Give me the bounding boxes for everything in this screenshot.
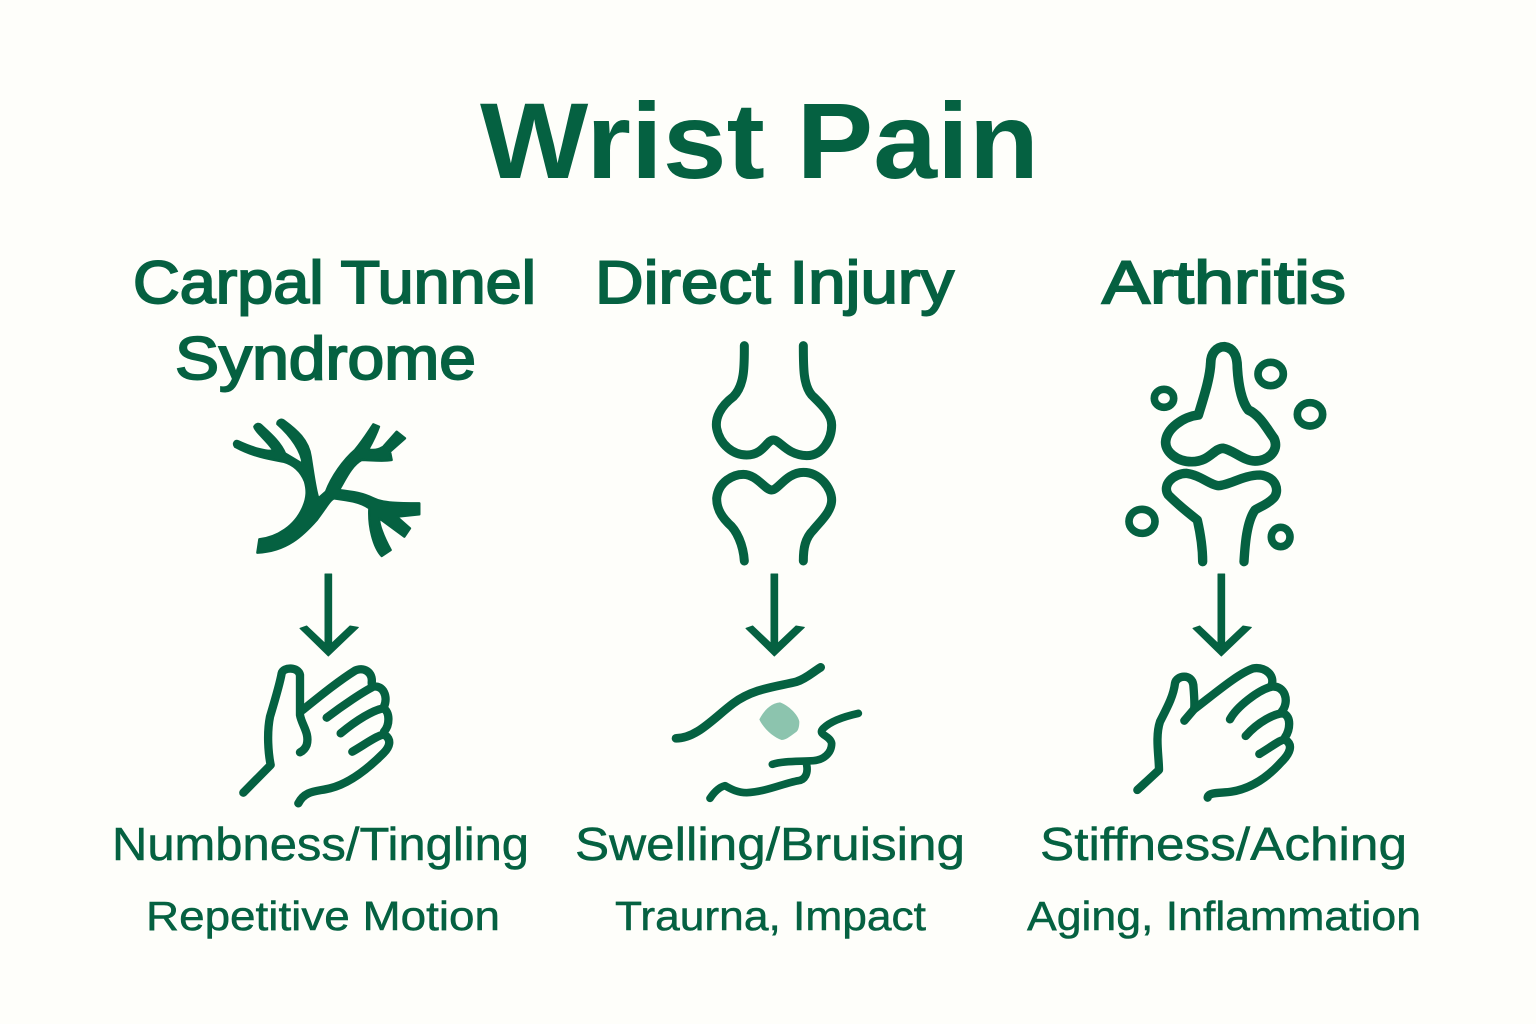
heading: arthritis: Arthritis	[1102, 249, 1346, 316]
heading: direct injury: Direct Injury	[595, 249, 954, 316]
icon: healthy joint	[716, 346, 832, 561]
panel: direct injury	[575, 249, 965, 939]
panel: arthritis	[1027, 249, 1421, 939]
icon: hand with bruise	[676, 667, 858, 798]
arrow: down	[746, 574, 804, 656]
symptom text: Numbness/Tingling	[112, 818, 529, 870]
heading: carpal tunnel syndrome: Syndrome	[175, 325, 476, 392]
cause text: Aging, Inflammation	[1027, 893, 1421, 939]
symptom text: Stiffness/Aching	[1040, 818, 1407, 870]
title: Wrist Pain	[480, 80, 1039, 201]
panel: carpal tunnel syndrome	[112, 249, 536, 939]
heading: carpal tunnel syndrome: Carpal Tunnel	[133, 249, 536, 316]
icon: hand with stiffness	[1137, 668, 1290, 798]
icon: nerve	[234, 420, 419, 556]
arrow: down	[1193, 574, 1251, 656]
cause text: Traurna, Impact	[615, 893, 927, 939]
heading: carpal tunnel syndrome	[133, 249, 536, 392]
cause text: Repetitive Motion	[146, 893, 500, 939]
icon: inflamed joint	[1129, 347, 1323, 562]
arrow: down	[300, 574, 358, 656]
icon: hand with numbness	[243, 669, 389, 803]
symptom text: Swelling/Bruising	[575, 818, 965, 870]
bruise spot	[759, 702, 799, 740]
